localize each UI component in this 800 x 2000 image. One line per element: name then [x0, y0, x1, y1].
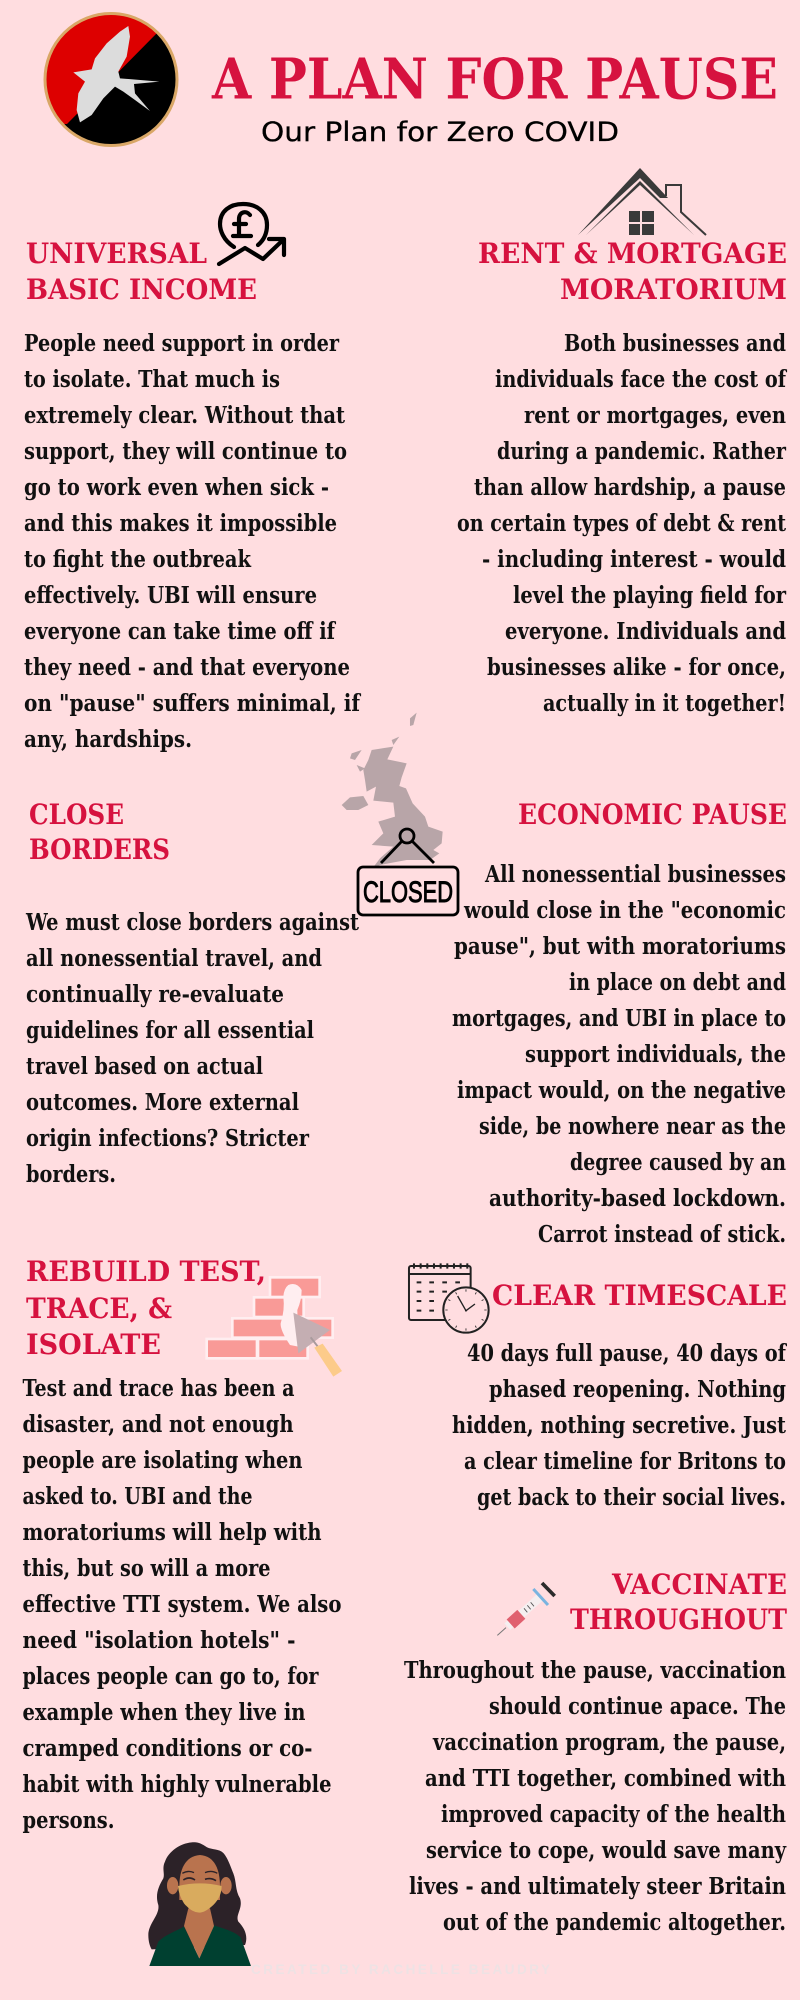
- body: rent and mortgage moratorium: [457, 329, 788, 717]
- heading: close borders: [29, 798, 170, 866]
- body: rebuild test trace isolate: [22, 1374, 342, 1834]
- body: rebuild test trace isolate: habit with highly vulnerable: [22, 1770, 332, 1798]
- body: clear timescale: [452, 1339, 788, 1511]
- body: close borders: outcomes. More external: [26, 1088, 299, 1116]
- body: rebuild test trace isolate: persons.: [22, 1806, 114, 1834]
- body: close borders: all nonessential travel, and: [26, 944, 322, 972]
- body: universal basic income: effectively. UBI will ensure: [24, 581, 317, 609]
- panel: clear timescale: [409, 1263, 788, 1511]
- body: universal basic income: on "pause" suffers minimal, if: [24, 689, 362, 717]
- body: rebuild test trace isolate: asked to. UBI and the: [22, 1482, 252, 1510]
- body: rebuild test trace isolate: places people can go to, for: [22, 1662, 319, 1690]
- panel: close borders: [25, 798, 359, 1188]
- body: rebuild test trace isolate: disaster, and not enough: [22, 1410, 294, 1438]
- body: close borders: continually re-evaluate: [26, 980, 284, 1008]
- panel: universal basic income: [24, 204, 362, 753]
- body: rebuild test trace isolate: effective TTI system. We also: [22, 1590, 342, 1618]
- body: rebuild test trace isolate: Test and trace has been a: [22, 1374, 294, 1402]
- body: universal basic income: extremely clear. Without that: [24, 401, 345, 429]
- body: rebuild test trace isolate: example when they live in: [22, 1698, 306, 1726]
- body: universal basic income: support, they will continue to: [24, 437, 347, 465]
- footer credit: CREATED BY RACHELLE BEAUDRY: [251, 1962, 550, 1977]
- body: universal basic income: to isolate. That much is: [24, 365, 280, 393]
- body: rebuild test trace isolate: people are isolating when: [22, 1446, 302, 1474]
- heading: rebuild test trace isolate: TRACE, &: [26, 1292, 172, 1325]
- icon: calendar and clock: [409, 1263, 489, 1333]
- body: rebuild test trace isolate: this, but so will a more: [22, 1554, 270, 1582]
- heading: clear timescale: CLEAR TIMESCALE: [492, 1279, 787, 1312]
- body: universal basic income: everyone can take time off if: [24, 617, 337, 645]
- body: close borders: travel based on actual: [26, 1052, 263, 1080]
- body: universal basic income: and this makes it impossible: [24, 509, 337, 537]
- body: close borders: guidelines for all essential: [26, 1016, 314, 1044]
- heading: rent and mortgage moratorium: MORATORIUM: [560, 273, 787, 306]
- body: close borders: [25, 908, 359, 1188]
- body: universal basic income: to fight the outbreak: [24, 545, 252, 573]
- icon: uk map: [342, 713, 443, 872]
- heading: rebuild test trace isolate: [26, 1255, 266, 1361]
- heading: universal basic income: [26, 237, 257, 306]
- subtitle: Our Plan for Zero COVID: [261, 117, 619, 148]
- panel: economic pause: [452, 798, 787, 1248]
- body: close borders: We must close borders against: [25, 908, 359, 936]
- body: close borders: origin infections? Stricter: [26, 1124, 309, 1152]
- body: universal basic income: any, hardships.: [24, 725, 192, 753]
- icon: house: [578, 168, 706, 235]
- heading: rent and mortgage moratorium: [478, 237, 787, 306]
- panel: rebuild test trace isolate: [22, 1255, 342, 1834]
- icon: bricks and trowel: [207, 1277, 342, 1377]
- body: rebuild test trace isolate: need "isolation hotels" -: [22, 1626, 296, 1654]
- heading: close borders: CLOSE: [29, 798, 124, 831]
- panel: vaccinate throughout: [404, 1568, 787, 1936]
- heading: rebuild test trace isolate: ISOLATE: [26, 1328, 161, 1361]
- body: economic pause: [452, 860, 786, 1248]
- body: universal basic income: go to work even when sick -: [24, 473, 329, 501]
- heading: universal basic income: BASIC INCOME: [26, 273, 257, 306]
- icon: closed sign: [358, 829, 458, 915]
- panel: rent and mortgage moratorium: [457, 168, 788, 717]
- heading: universal basic income: UNIVERSAL: [26, 237, 207, 270]
- icon: woman wearing mask: [148, 1842, 251, 1966]
- heading: vaccinate throughout: [570, 1568, 787, 1636]
- icon: syringe: [497, 1583, 555, 1635]
- body: universal basic income: they need - and that everyone: [24, 653, 350, 681]
- body: universal basic income: [24, 329, 362, 753]
- icon: closed sign: CLOSED: [363, 876, 453, 909]
- heading: rebuild test trace isolate: REBUILD TEST,: [26, 1255, 266, 1288]
- heading: vaccinate throughout: VACCINATE: [611, 1568, 787, 1601]
- icon: pound growth: [219, 204, 284, 264]
- body: universal basic income: People need support in order: [24, 329, 340, 357]
- icon: swallow logo: [44, 12, 178, 147]
- heading: close borders: BORDERS: [29, 833, 170, 866]
- heading: rent and mortgage moratorium: RENT & MORTGAGE: [478, 237, 787, 270]
- body: rebuild test trace isolate: cramped conditions or co-: [22, 1734, 312, 1762]
- body: close borders: borders.: [26, 1160, 116, 1188]
- body: rebuild test trace isolate: moratoriums will help with: [22, 1518, 322, 1546]
- body: vaccinate throughout: [404, 1656, 787, 1936]
